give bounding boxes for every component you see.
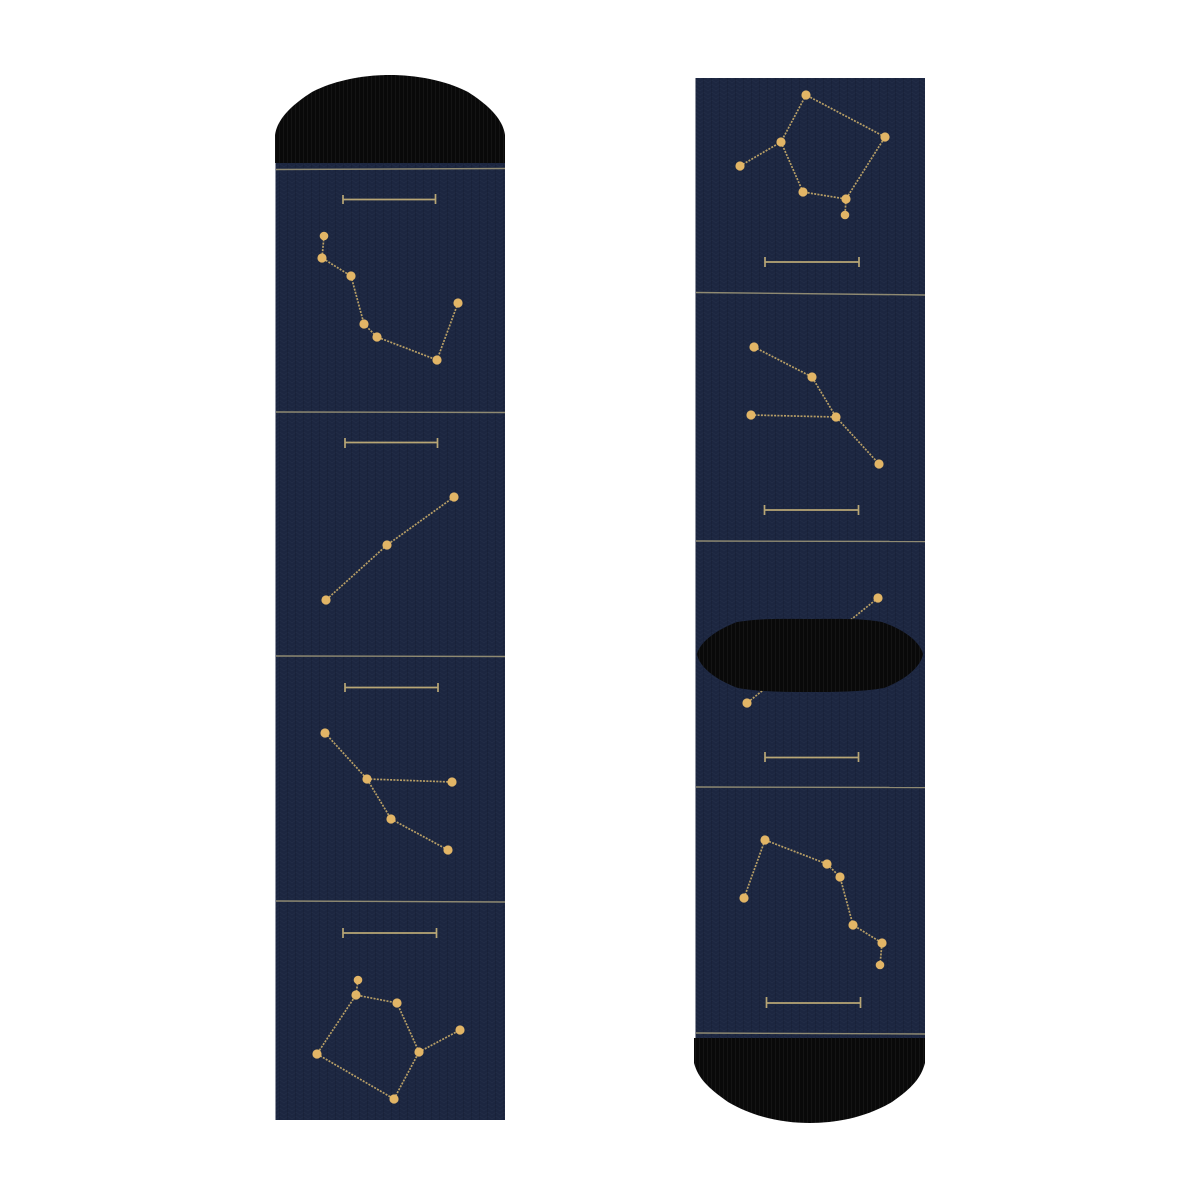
constellation: left 3 [320,728,457,855]
constellation: right 1 [735,90,890,219]
sock body right [696,78,925,1040]
constellation: right 4 [739,835,887,969]
toe cap right [694,1038,925,1123]
divider lines right [696,292,925,1034]
bracket marks right [764,257,860,1008]
bracket marks left [343,194,438,938]
sock body left [276,158,505,1120]
panel: left sock [275,75,505,1120]
constellation: left 4 [312,976,465,1104]
divider lines left [276,168,505,902]
constellation: right 2 [746,342,884,469]
constellation: right 3 (behind heel) [742,593,883,708]
heel patch [697,619,923,692]
toe cap left [275,75,505,163]
panel: right sock [694,78,925,1123]
constellation: left 2 [321,492,459,605]
constellation: left 1 [317,232,463,365]
